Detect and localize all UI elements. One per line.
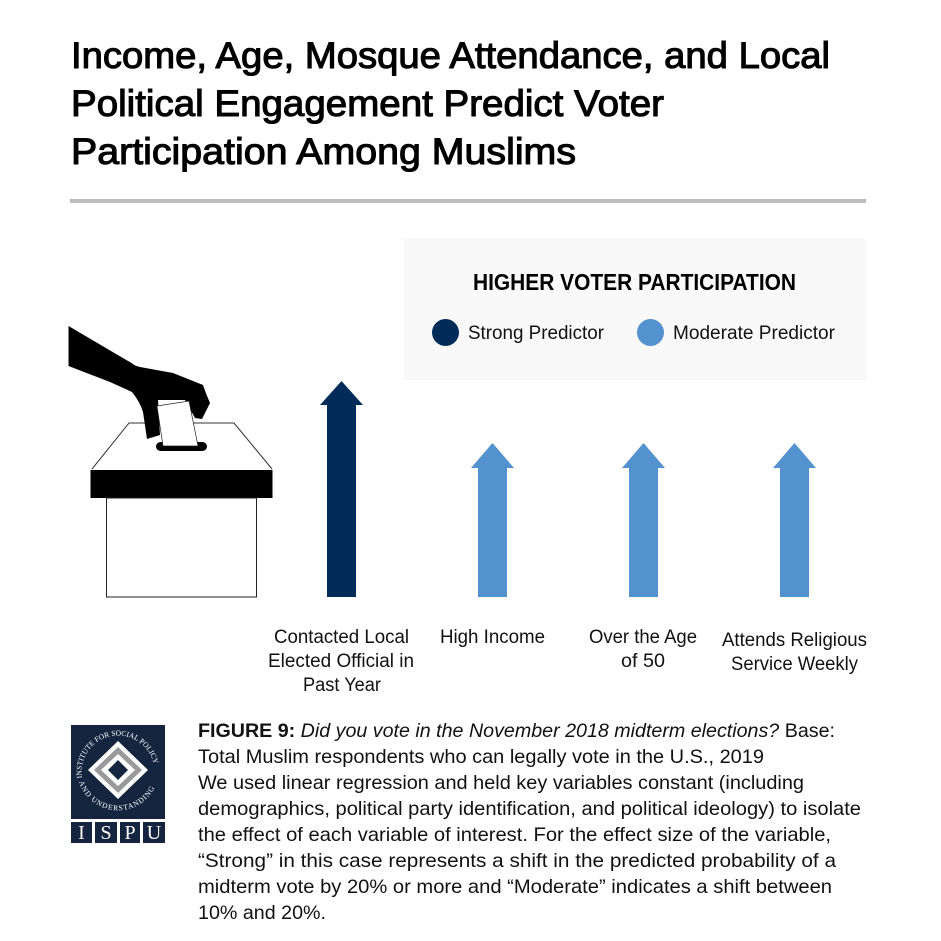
hand: [68, 326, 210, 439]
logo: ISPU: [71, 725, 165, 844]
title: Participation Among Muslims: [71, 130, 576, 172]
figure note text block: 10% and 20%.: [198, 902, 326, 924]
ballot slot: [156, 442, 207, 451]
figure note text block: the effect of each variable of interest. For the effect size of the variable,: [198, 824, 831, 846]
label: attends religious service: Service Weekly: [731, 654, 858, 675]
logo: ISPU: S: [100, 822, 112, 844]
logo: ISPU: P: [124, 822, 136, 844]
label: attends religious service: [722, 630, 867, 675]
logo: ISPU: AND UNDERSTANDING: [78, 782, 154, 810]
ballot box lid outline: [92, 423, 272, 469]
label: over the age of 50: Over the Age: [589, 627, 697, 648]
legend heading: HIGHER VOTER PARTICIPATION: [473, 269, 796, 295]
label: high income: High Income: [440, 627, 545, 648]
ballot box band: [90, 470, 272, 498]
legend item: moderate predictor: [637, 319, 836, 346]
panel: legend: [404, 238, 867, 380]
icon: hand casting ballot into box: [68, 326, 272, 597]
figure note text block: Total Muslim respondents who can legally vote in the U.S., 2019: [198, 746, 764, 768]
title: Income, Age, Mosque Attendance, and Local: [71, 34, 830, 76]
logo: ISPU: I: [78, 822, 85, 844]
ballot paper: [157, 401, 198, 446]
legend item: strong predictor: Strong Predictor: [468, 323, 605, 344]
label: contacted local official: [268, 627, 414, 696]
figure note text block: midterm vote by 20% or more and “Moderate” indicates a shift between: [198, 876, 832, 898]
figure note text block: “Strong” in this case represents a shift in the predicted probability of a: [198, 850, 836, 872]
logo: ISPU: INSTITUTE FOR SOCIAL POLICY: [76, 730, 158, 778]
arrow: attends religious service: [773, 443, 816, 597]
title: Political Engagement Predict Voter: [71, 82, 664, 124]
figure note text block: FIGURE 9: Did you vote in the November 2018 midterm elections? Base:: [198, 720, 835, 742]
legend item: moderate predictor: Moderate Predictor: [673, 323, 836, 344]
label: contacted local official: Elected Official in: [268, 651, 414, 672]
label: over the age of 50: of 50: [621, 651, 665, 672]
label: contacted local official: Contacted Local: [274, 627, 409, 648]
figure note text block: We used linear regression and held key variables constant (including: [198, 772, 804, 794]
arrow: contacted local official: [320, 381, 363, 597]
label: contacted local official: Past Year: [303, 675, 382, 696]
label: attends religious service: Attends Religious: [722, 630, 867, 651]
arrow: high income: [471, 443, 514, 597]
title: [71, 34, 830, 172]
legend item: strong predictor: [432, 319, 605, 346]
logo: ISPU: U: [147, 822, 162, 844]
figure note text block: demographics, political party identification, and political ideology) to isolate: [198, 798, 861, 820]
label: over the age of 50: [589, 627, 697, 672]
figure note text block: [198, 720, 861, 924]
arrow: over the age of 50: [622, 443, 665, 597]
ballot box body: [106, 498, 256, 597]
